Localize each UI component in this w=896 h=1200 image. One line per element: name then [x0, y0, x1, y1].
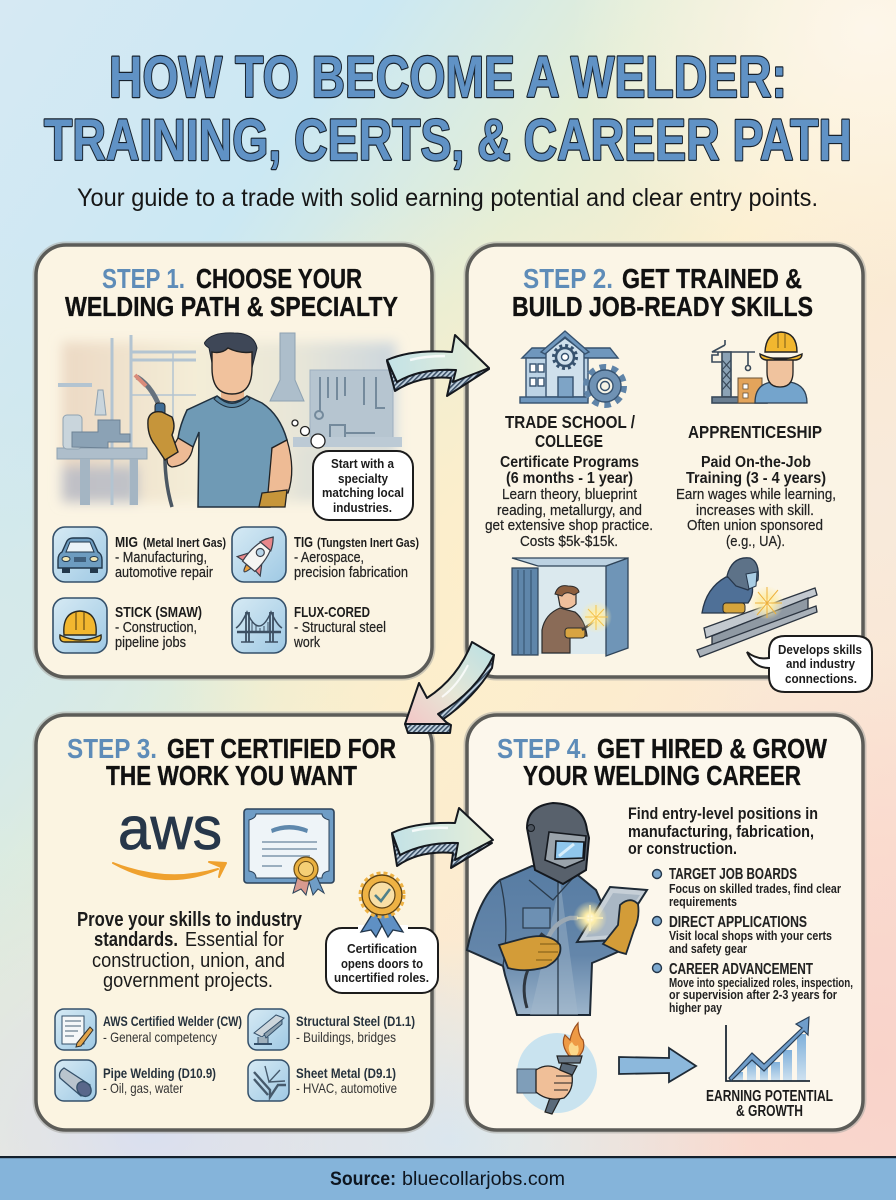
text block: prove your skills: construction, union, and: [92, 949, 285, 972]
item: stick: [53, 598, 202, 653]
footer: source bar: bluecollarjobs.com: [402, 1168, 565, 1190]
panel: step 2 training: [467, 245, 863, 677]
text: structural steel: Structural Steel (D1.1): [296, 1013, 415, 1029]
text: MIG: automotive repair: [115, 565, 213, 581]
text: MIG: (Metal Inert Gas): [143, 536, 226, 550]
text: sheet metal: [296, 1065, 397, 1096]
label: earning potential and growth: [706, 1088, 833, 1120]
text block: find entry-level positions: [628, 805, 818, 858]
heading: step 1: STEP 1.: [102, 263, 185, 294]
heading: step 4: YOUR WELDING CAREER: [523, 760, 801, 791]
text block: prove your skills: government projects.: [103, 969, 273, 992]
chart: earning potential growth: [726, 1017, 810, 1081]
label: earning potential and growth: & GROWTH: [736, 1103, 803, 1120]
heading: step 3: STEP 3.: [67, 733, 157, 764]
icon: hand holding torch: [517, 1023, 597, 1114]
footer: source bar: [0, 1156, 896, 1200]
heading: step 3: THE WORK YOU WANT: [106, 760, 357, 791]
arrow: to earning potential: [619, 1048, 696, 1082]
heading: step 4: [497, 733, 827, 791]
logo: aws: aws: [118, 795, 222, 862]
text: TIG: precision fabrication: [294, 565, 408, 581]
text: stick: STICK (SMAW): [115, 604, 202, 621]
icon: ribbon badge: [358, 873, 408, 937]
title: [44, 45, 852, 173]
callout: certification opens doors: [326, 928, 438, 993]
bullet: direct applications: [652, 914, 832, 956]
heading: step 4: GET HIRED & GROW: [597, 733, 827, 764]
text block: prove your skills: [77, 908, 302, 992]
text: stick: [115, 604, 202, 651]
heading: step 1: [65, 263, 398, 322]
text: flux-cored: work: [293, 635, 321, 651]
icon: bridge: [232, 598, 286, 653]
text: trade school column: reading, metallurgy, and: [497, 503, 642, 519]
item: pipe welding: [55, 1060, 216, 1101]
icon: certificate: [244, 809, 334, 895]
thought bubbles: [292, 420, 325, 448]
bullet: direct applications: and safety gear: [669, 941, 747, 956]
text: trade school column: [485, 412, 653, 550]
illustration: welder in workshop: [57, 333, 402, 507]
text: pipe welding: [103, 1065, 216, 1096]
text: flux-cored: - Structural steel: [294, 620, 386, 636]
callout: start with a specialty: Start with a: [331, 456, 395, 471]
text block: find entry-level positions: manufacturing, fabrication,: [628, 823, 814, 841]
callout: develops skills: Develops skills: [778, 642, 862, 657]
item: sheet metal: [248, 1060, 397, 1101]
text block: find entry-level positions: or construction.: [628, 840, 737, 858]
icon: apprentice with crane: [712, 332, 807, 403]
illustration: welding booth student: [512, 558, 628, 656]
panel: step 1 choose path: [36, 245, 432, 677]
text: sheet metal: - HVAC, automotive: [296, 1080, 397, 1096]
text: MIG: MIG: [115, 534, 138, 551]
heading: step 1: WELDING PATH & SPECIALTY: [65, 291, 398, 322]
text: apprenticeship column: (e.g., UA).: [726, 534, 785, 550]
panel: step 4 career: [467, 715, 863, 1130]
text: AWS CW: - General competency: [103, 1029, 217, 1045]
text: apprenticeship column: Training (3 - 4 years): [686, 470, 826, 487]
subtitle: Your guide to a trade with solid earning potential and clear entry points.: [77, 184, 818, 212]
icon: pipe: [55, 1060, 96, 1101]
text: sheet metal: Sheet Metal (D9.1): [296, 1065, 396, 1081]
heading: step 4: STEP 4.: [497, 733, 587, 764]
text: structural steel: - Buildings, bridges: [296, 1029, 396, 1045]
text: flux-cored: [293, 604, 386, 651]
text: apprenticeship column: Often union sponsored: [687, 518, 823, 534]
heading: step 2: GET TRAINED &: [622, 263, 802, 294]
text: trade school column: TRADE SCHOOL /: [505, 412, 635, 432]
text: apprenticeship column: Paid On-the-Job: [701, 454, 811, 471]
text: trade school column: get extensive shop practice.: [485, 518, 653, 534]
text: AWS CW: [103, 1013, 242, 1045]
callout: start with a specialty: matching local: [322, 485, 404, 500]
text: pipe welding: - Oil, gas, water: [103, 1080, 183, 1096]
bullet: direct applications: DIRECT APPLICATIONS: [669, 914, 807, 931]
text: TIG: (Tungsten Inert Gas): [317, 536, 419, 550]
text: TIG: - Aerospace,: [294, 550, 364, 566]
text: apprenticeship column: [676, 422, 836, 550]
arrow: step 3 to step 4: [392, 808, 493, 868]
item: flux-cored: [232, 598, 386, 653]
icon: trade school with gear: [520, 331, 624, 405]
callout: develops skills: and industry: [786, 656, 856, 671]
text block: prove your skills: Essential for: [185, 928, 284, 951]
arrow: step 2 to step 3: [405, 642, 494, 733]
text: trade school column: (6 months - 1 year): [506, 470, 633, 487]
callout: start with a specialty: [313, 451, 413, 520]
heading: step 3: GET CERTIFIED FOR: [167, 733, 396, 764]
text: apprenticeship column: increases with skill.: [696, 503, 814, 519]
icon: rocket: [232, 527, 286, 582]
callout: develops skills: [747, 636, 872, 692]
text: trade school column: Costs $5k-$15k.: [520, 534, 618, 550]
bullet: target job boards: TARGET JOB BOARDS: [669, 866, 797, 883]
callout: certification opens doors: uncertified roles.: [334, 970, 429, 985]
item: AWS certified welder: [55, 1009, 242, 1050]
icon: car: [53, 527, 107, 582]
illustration: apprentice welding I-beam: [697, 558, 817, 657]
text: TIG: [294, 534, 419, 581]
bullet: target job boards: [652, 866, 841, 909]
bullet: direct applications: Visit local shops with your certs: [669, 928, 832, 943]
text: stick: pipeline jobs: [115, 635, 186, 651]
heading: step 1: CHOOSE YOUR: [196, 263, 362, 294]
item: TIG: [232, 527, 419, 582]
heading: step 2: [512, 263, 813, 322]
bullet: target job boards: requirements: [669, 894, 737, 909]
text block: prove your skills: standards.: [94, 928, 178, 951]
item: structural steel: [248, 1009, 415, 1050]
illustration: welder with helmet: [467, 803, 647, 1015]
text: pipe welding: Pipe Welding (D10.9): [103, 1065, 216, 1081]
text: MIG: - Manufacturing,: [115, 550, 207, 566]
text: apprenticeship column: APPRENTICESHIP: [688, 422, 822, 442]
text: stick: - Construction,: [115, 620, 197, 636]
text: TIG: TIG: [294, 534, 313, 551]
text: MIG: [115, 534, 226, 581]
footer: source bar: Source:: [330, 1168, 396, 1190]
heading: step 2: STEP 2.: [523, 263, 613, 294]
text: apprenticeship column: Earn wages while learning,: [676, 487, 836, 503]
bullet: career advancement: higher pay: [669, 1000, 723, 1015]
callout: start with a specialty: specialty: [338, 471, 389, 486]
arrow: step 1 to step 2: [387, 335, 489, 396]
bullet: career advancement: or supervision after 2-3 years for: [669, 987, 837, 1002]
icon: steel beam: [248, 1009, 289, 1050]
bullet: career advancement: [652, 961, 853, 1015]
icon: hard hat: [53, 598, 107, 653]
callout: start with a specialty: industries.: [333, 500, 392, 515]
bullet: career advancement: CAREER ADVANCEMENT: [669, 961, 813, 978]
callout: certification opens doors: opens doors to: [341, 956, 423, 971]
panel: step 3 certification: [36, 715, 438, 1130]
item: MIG: [53, 527, 226, 582]
label: earning potential and growth: EARNING POTENTIAL: [706, 1088, 833, 1105]
text: trade school column: Learn theory, blueprint: [502, 487, 637, 503]
text: flux-cored: FLUX-CORED: [294, 604, 370, 621]
callout: certification opens doors: Certification: [347, 941, 417, 956]
callout: develops skills: connections.: [785, 671, 857, 686]
heading: step 2: BUILD JOB-READY SKILLS: [512, 291, 813, 322]
text: AWS CW: AWS Certified Welder (CW): [103, 1013, 242, 1029]
heading: step 3: [67, 733, 396, 791]
icon: metal corner joint: [248, 1060, 289, 1101]
text block: prove your skills: Prove your skills to industry: [77, 908, 302, 931]
bullet: target job boards: Focus on skilled trades, find clear: [669, 881, 841, 896]
text: structural steel: [296, 1013, 415, 1045]
text: trade school column: Certificate Programs: [500, 454, 639, 471]
text: trade school column: COLLEGE: [535, 431, 603, 451]
text block: find entry-level positions: Find entry-level positions in: [628, 805, 818, 823]
icon: document with pencil: [55, 1009, 96, 1050]
